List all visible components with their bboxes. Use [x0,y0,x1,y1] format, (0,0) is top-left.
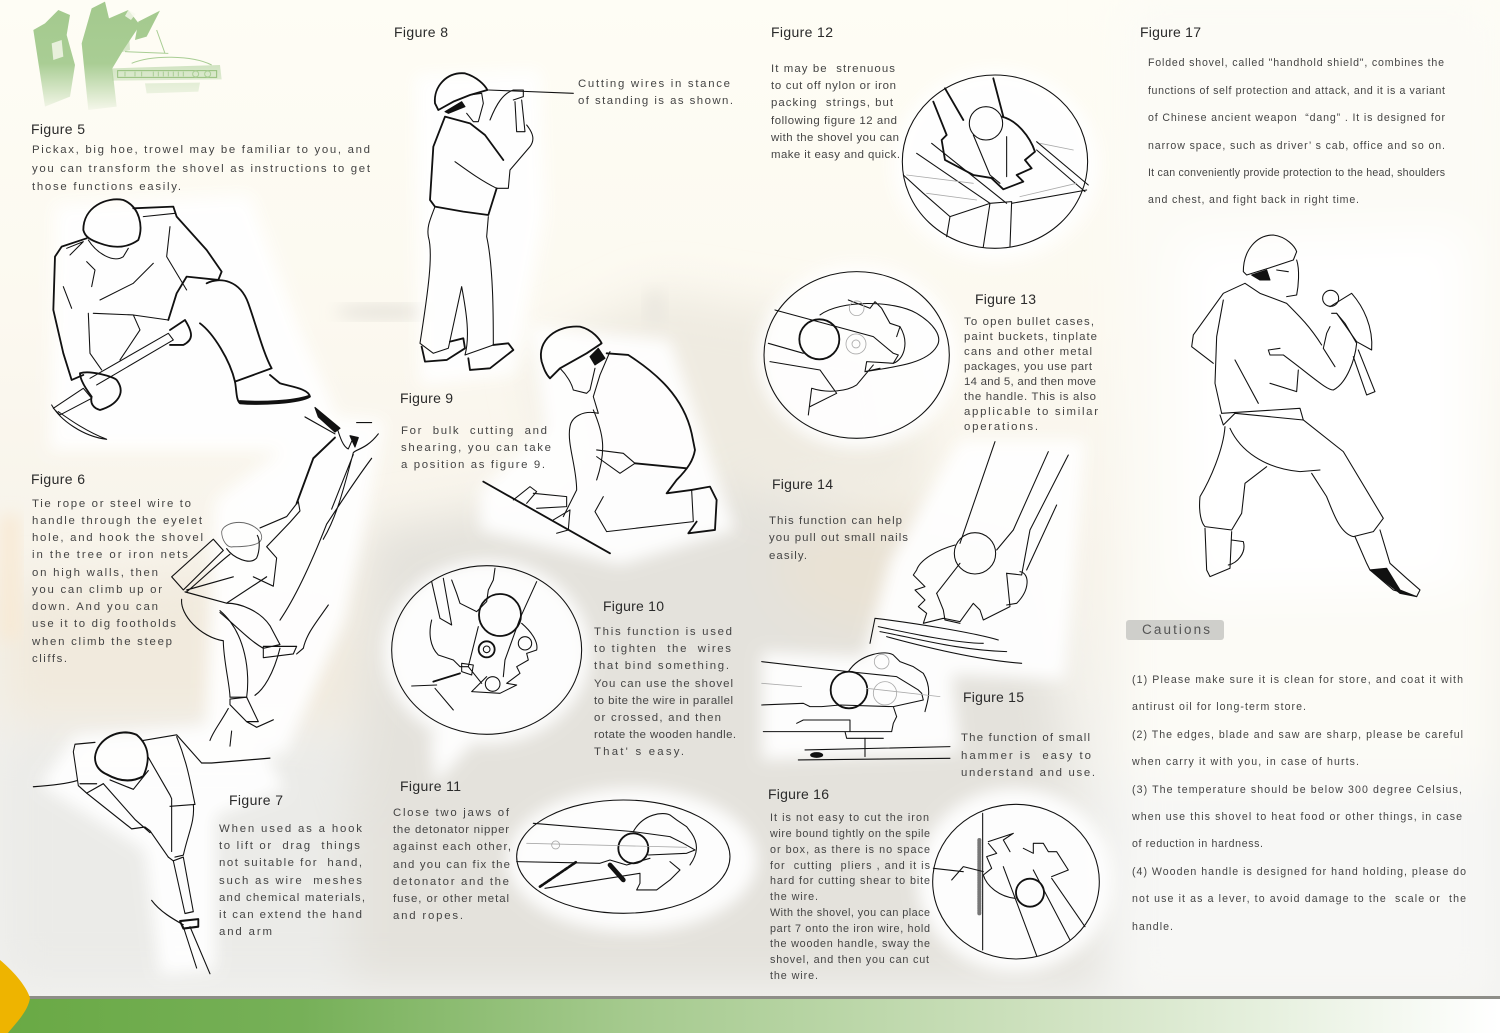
text block: figure 12: to cut off nylon or iron [771,80,896,92]
text block: cautions list: (1) Please make sure it is clean for store, and coat it with [1132,674,1463,686]
text block: figure 16: part 7 onto the iron wire, hold [770,923,930,935]
drawing: soldier climbing a rope [172,408,378,746]
text block: figure 14: easily. [769,550,807,562]
text block: figure 6: cliffs. [32,653,67,665]
text block: figure 11 [393,807,511,922]
text block: figure 11: detonator and the [393,876,509,888]
text block: figure 13: operations. [964,421,1038,433]
text block: figure 9: a position as figure 9. [401,459,545,471]
heading: Figure 10: Figure 10 [603,598,664,614]
text block: figure 11: against each other, [393,841,511,853]
panel: figure 12 [770,24,1088,248]
text block: figure 11: Close two jaws of [393,807,510,819]
heading: Figure 13: Figure 13 [975,291,1036,307]
text block: figure 6: on high walls, then [32,567,158,579]
text block: figure 14: This function can help [769,515,902,527]
icon: green vehicle and soldiers emblem [33,2,222,110]
text block: figure 12 [770,63,900,161]
text block: figure 12: make it easy and quick. [771,149,900,161]
text block: cautions list: of reduction in hardness. [1132,838,1263,850]
text block: figure 7: to lift or drag things [219,840,360,852]
text block: figure 6 [31,498,203,665]
text block: figure 5: those functions easily. [32,181,181,193]
text block: cautions list: when carry it with you, in case of hurts. [1131,756,1359,768]
text block: figure 9 [401,425,551,471]
drawing: small hammer detail [762,653,950,760]
text block: figure 13: cans and other metal [964,346,1092,358]
text block: cautions list: handle. [1132,921,1173,933]
drawing: wire tightening detail circle [392,566,582,734]
heading: Figure 7: Figure 7 [229,792,283,808]
panel: figure 7 [33,732,365,974]
heading: Figure 17: Figure 17 [1140,24,1201,40]
text block: figure 7: it can extend the hand [219,909,362,921]
panel: figure 8 [394,24,733,370]
text block: figure 6: you can climb up or [32,584,162,596]
heading: Figure 11: Figure 11 [400,778,461,794]
text block: figure 17: functions of self protection and attack, and it is a variant [1148,85,1445,97]
text block: cautions list: (4) Wooden handle is designed for hand holding, please do [1132,866,1466,878]
background: soft halo behind figure 17 [1180,230,1465,595]
heading: Figure 6: Figure 6 [31,471,85,487]
text block: figure 7: When used as a hook [219,823,362,835]
text block: figure 10 [594,626,736,758]
text block: figure 6: down. And you can [32,601,158,613]
text block: figure 15: The function of small [961,732,1090,744]
text block: figure 16: the wooden handle, sway the [770,938,930,950]
text block: figure 13 [964,316,1098,433]
panel: figure 17 [1140,24,1445,597]
heading: Figure 15: Figure 15 [963,689,1024,705]
text block: figure 16: It is not easy to cut the iron [770,812,929,824]
text block: figure 7: and arm [219,926,272,938]
text block: figure 11: and ropes. [393,910,463,922]
heading: Figure 12: Figure 12 [771,24,833,40]
text block: figure 6: use it to dig footholds [32,618,176,630]
drawing: iron wire cutting detail circle [933,804,1099,959]
text block: figure 16: hard for cutting shear to bite [770,875,930,887]
panel: figure 11 [393,778,730,922]
panel: figure 5 [31,121,371,439]
panel: figure 9 [400,327,717,553]
text block: figure 10: that bind something. [594,660,729,672]
text block: figure 8: Cutting wires in stance [578,78,730,90]
heading: Figure 14: Figure 14 [772,476,833,492]
text block: figure 10: You can use the shovel [594,678,733,690]
text block: figure 13: To open bullet cases, [964,316,1094,328]
text block: figure 17: and chest, and fight back in right time. [1148,194,1359,206]
background: white halos behind drawings [40,69,1113,975]
drawing: soldier kneeling, cutting wire [483,327,717,553]
text block: figure 14: you pull out small nails [769,532,908,544]
text block: figure 16: With the shovel, you can place [770,907,930,919]
text block: figure 12: It may be strenuous [771,63,895,75]
text block: figure 15 [961,732,1095,779]
panel: figure 13 [764,272,1098,438]
text block: figure 16: shovel, and then you can cut [770,954,929,966]
drawing: soldier hooking with shovel [33,732,270,974]
drawing: can opening detail circle [764,272,949,438]
heading: Cautions label: Cautions [1142,622,1210,637]
text block: figure 15: understand and use. [961,767,1095,779]
text block: figure 13: applicable to similar [964,406,1098,418]
text block: figure 16: the wire. [770,891,818,903]
text block: figure 11: fuse, or other metal [393,893,509,905]
panel: figure 16 [768,786,1099,982]
text block: figure 10: rotate the wooden handle. [594,729,736,741]
text block: figure 5 [32,144,371,193]
text block: figure 17: Folded shovel, called "handhold shield", combines the [1148,57,1444,69]
text block: figure 9: For bulk cutting and [401,425,547,437]
text block: figure 10: to bite the wire in parallel [594,695,733,707]
text block: cautions list: when use this shovel to heat food or other things, in case [1131,811,1462,823]
text block: figure 7: not suitable for hand, [219,857,362,869]
text block: figure 11: the detonator nipper [393,824,509,836]
text block: figure 17: of Chinese ancient weapon “dang” . It is designed for [1148,112,1445,124]
text block: figure 17 [1148,57,1445,206]
text block: figure 13: the handle. This is also [964,391,1096,403]
text block: cautions list [1131,674,1466,933]
text block: figure 12: packing strings, but [771,97,894,109]
footer: green gradient strip [0,996,1500,1033]
panel: figure 10 [392,566,736,758]
text block: figure 16 [769,812,931,982]
panel: figure 14 [769,442,1068,663]
text block: figure 6: in the tree or iron nets [32,549,188,561]
text block: figure 11: and you can fix the [393,859,510,871]
text block: figure 6: Tie rope or steel wire to [32,498,191,510]
panel: figure 15 [762,653,1095,779]
text block: figure 6: handle through the eyelet [32,515,203,527]
text block: figure 9: shearing, you can take [401,442,551,454]
text block: cautions list: (2) The edges, blade and saw are sharp, please be careful [1132,729,1463,741]
heading: Figure 9: Figure 9 [400,390,453,406]
text block: figure 16: wire bound tightly on the spile [769,828,930,840]
text block: figure 7: and chemical materials, [219,892,365,904]
text block: figure 14 [769,515,908,562]
drawing: detonator nipper detail oval [517,800,730,913]
drawing: soldier using pickaxe [52,199,310,439]
drawing: soldier cutting wire standing [420,73,573,370]
panel: cautions [1126,620,1466,933]
text block: cautions list: antirust oil for long-term store. [1132,701,1306,713]
text block: figure 13: 14 and 5, and then move [964,376,1096,388]
text block: figure 8 [578,78,733,107]
text block: figure 15: hammer is easy to [961,750,1091,762]
text block: figure 13: packages, you use part [964,361,1093,373]
heading: Figure 16: Figure 16 [768,786,829,802]
text block: figure 6: hole, and hook the shovel [32,532,203,544]
text block: figure 8: of standing is as shown. [578,95,733,107]
drawing: pulling a nail detail [870,442,1068,663]
drawing: soldier with handhold shield [1192,235,1420,597]
text block: figure 6: when climb the steep [31,636,172,648]
text block: figure 10: to tighten the wires [594,643,731,655]
icon: yellow corner tab [0,960,30,1033]
text block: figure 17: It can conveniently provide protection to the head, shoulders [1148,167,1445,179]
text block: figure 5: Pickax, big hoe, trowel may be familiar to you, and [32,144,370,156]
drawing: packing strings cut detail circle [902,75,1088,248]
text block: figure 17: narrow space, such as driver’ s cab, office and so on. [1148,140,1445,152]
text block: figure 10: This function is used [594,626,732,638]
text block: figure 16: the wire. [770,970,818,982]
heading: Figure 5: Figure 5 [31,121,85,137]
text block: figure 7 [219,823,365,938]
text block: figure 16: for cutting pliers , and it is [770,860,931,872]
text block: figure 10: That' s easy. [594,746,684,758]
text block: figure 13: paint buckets, tinplate [964,331,1097,343]
text block: figure 12: with the shovel you can [770,132,899,144]
text block: figure 10: or crossed, and then [594,712,721,724]
text block: figure 12: following figure 12 and [771,115,897,127]
panel: figure 6 [31,408,378,746]
text block: figure 16: or box, as there is no space [770,844,930,856]
text block: cautions list: (3) The temperature should be below 300 degree Celsius, [1132,784,1462,796]
heading: Cautions label [1126,620,1224,640]
text block: cautions list: not use it as a lever, to avoid damage to the scale or the [1132,893,1466,905]
text block: figure 5: you can transform the shovel as instructions to get [32,163,371,175]
text block: figure 7: such as wire meshes [219,875,362,887]
heading: Figure 8: Figure 8 [394,24,448,40]
